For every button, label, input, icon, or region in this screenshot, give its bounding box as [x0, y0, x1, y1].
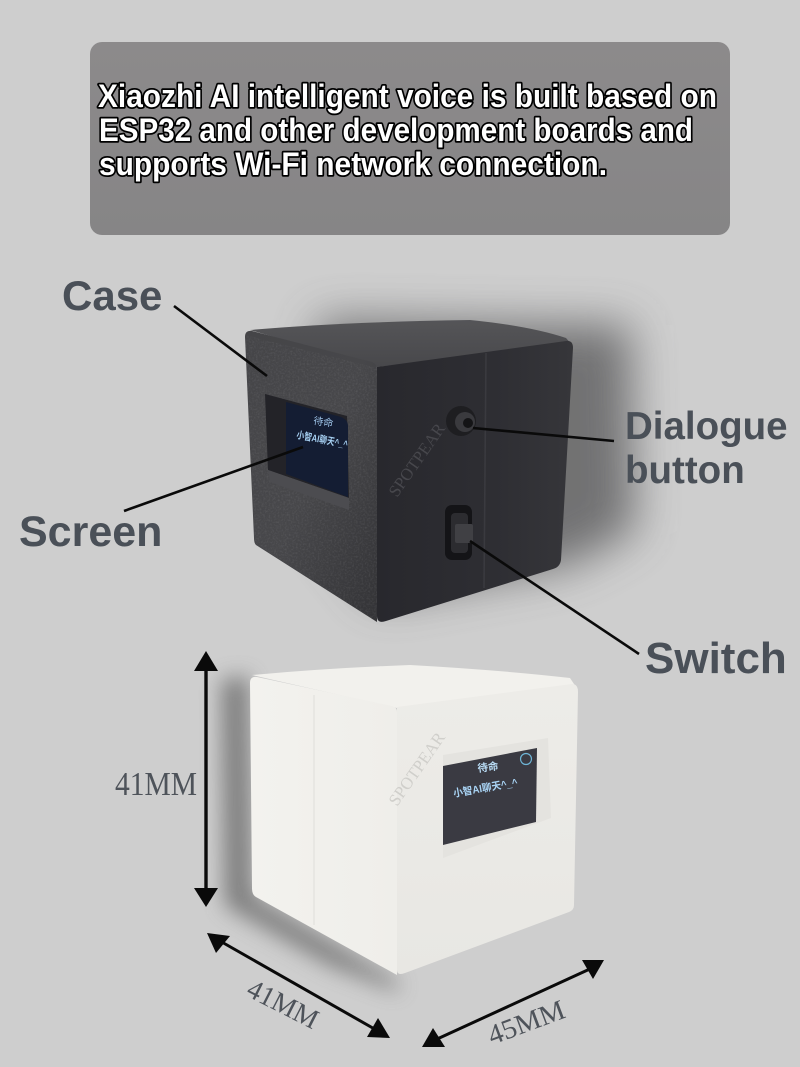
dimension: width 45MM: 45MM — [484, 994, 569, 1052]
photo: black device — [245, 320, 635, 622]
white device watermark: SPOTPEAR — [385, 728, 449, 809]
label: Case: Case — [62, 272, 162, 319]
panel: intro banner — [90, 42, 730, 235]
photo: white device — [222, 665, 578, 992]
intro text: ESP32 and other development boards and — [99, 112, 693, 148]
dimension: height 41MM: 41MM — [115, 766, 197, 803]
label: Case — [62, 272, 267, 376]
dialogue button — [446, 406, 476, 436]
label: Switch — [470, 541, 787, 683]
dimension: depth 41MM — [207, 933, 390, 1038]
label: Screen: Screen — [19, 508, 162, 556]
device side face — [377, 341, 573, 622]
label: Screen — [19, 447, 303, 556]
label: Dialogue button — [473, 405, 788, 492]
intro text: Xiaozhi AI intelligent voice is built based on — [98, 78, 717, 114]
white device front face — [397, 684, 578, 974]
white device screen — [443, 738, 551, 858]
white device left face — [250, 677, 397, 975]
label: Switch: Switch — [645, 634, 787, 683]
device top face — [250, 320, 572, 367]
dimension: depth 41MM: 41MM — [242, 974, 324, 1036]
intro text: supports Wi-Fi network connection. — [99, 146, 607, 182]
white device top face — [252, 665, 578, 708]
dimension: height 41MM — [115, 651, 218, 907]
switch — [445, 505, 473, 560]
device screen: 待命 — [313, 414, 334, 430]
device screen: 小智AI聊天^_^ — [295, 428, 349, 451]
white device screen: 小智AI聊天^_^ — [452, 776, 519, 800]
label: Dialogue button: Dialogue — [625, 405, 788, 448]
device screen — [265, 394, 349, 510]
white device screen: 待命 — [477, 759, 500, 775]
label: Dialogue button: button — [625, 449, 745, 492]
device front face — [245, 331, 377, 622]
intro text — [98, 78, 717, 182]
watermark: SPOTPEAR — [385, 419, 449, 500]
dimension: width 45MM — [422, 960, 604, 1052]
